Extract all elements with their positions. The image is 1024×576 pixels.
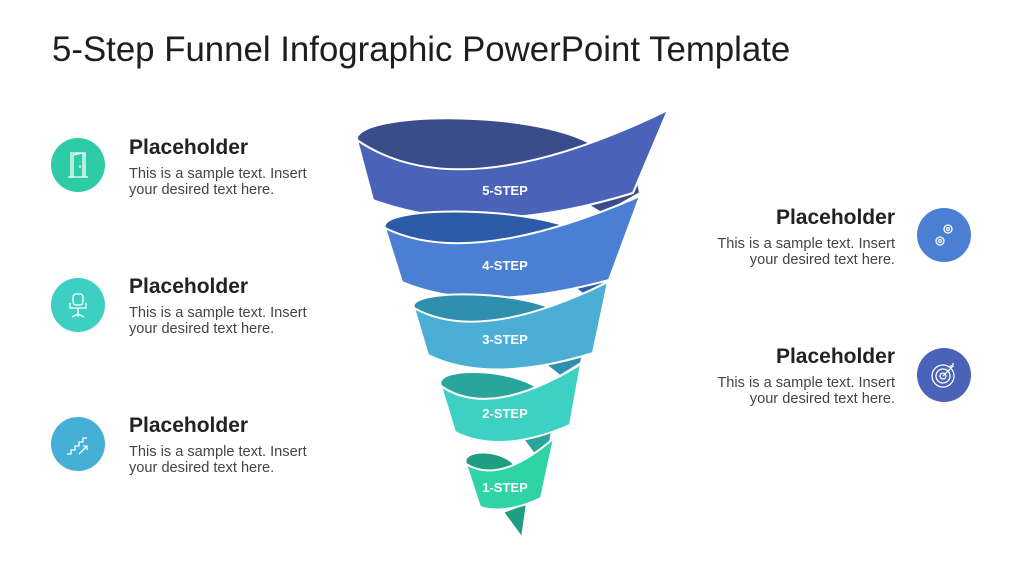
icon: target	[917, 348, 971, 402]
level 3: 3-STEP	[482, 332, 528, 347]
title: 5-Step Funnel Infographic PowerPoint Template	[52, 30, 790, 69]
icon: gears	[917, 208, 971, 262]
text block: right 1	[717, 206, 895, 268]
text block: right 2: Placeholder	[776, 345, 895, 368]
level 1	[465, 438, 554, 510]
text block: left 1	[129, 136, 307, 198]
icon: chair	[51, 278, 105, 332]
text block: right 2	[717, 345, 895, 407]
level 5	[357, 110, 668, 218]
text block: left 3: This is a sample text. Insert your desired text here.	[129, 444, 307, 476]
icon: stairs	[51, 417, 105, 471]
level 2	[440, 364, 581, 442]
back pieces	[503, 177, 640, 538]
text block: left 1: Placeholder	[129, 136, 248, 159]
text block: right 2: This is a sample text. Insert your desired text here.	[717, 375, 895, 407]
icon: door	[51, 138, 105, 192]
level 2: 2-STEP	[482, 406, 528, 421]
text block: left 1: This is a sample text. Insert your desired text here.	[129, 166, 307, 198]
text block: left 2	[129, 275, 307, 337]
text block: left 2: This is a sample text. Insert your desired text here.	[129, 305, 307, 337]
level 4	[385, 196, 640, 298]
text block: right 1: Placeholder	[776, 206, 895, 229]
level 1: 1-STEP	[482, 480, 528, 495]
text block: left 2: Placeholder	[129, 275, 248, 298]
text block: left 3	[129, 414, 307, 476]
text block: right 1: This is a sample text. Insert your desired text here.	[717, 236, 895, 268]
level 4: 4-STEP	[482, 258, 528, 273]
level 5: 5-STEP	[482, 183, 528, 198]
level 3	[414, 282, 608, 370]
text block: left 3: Placeholder	[129, 414, 248, 437]
